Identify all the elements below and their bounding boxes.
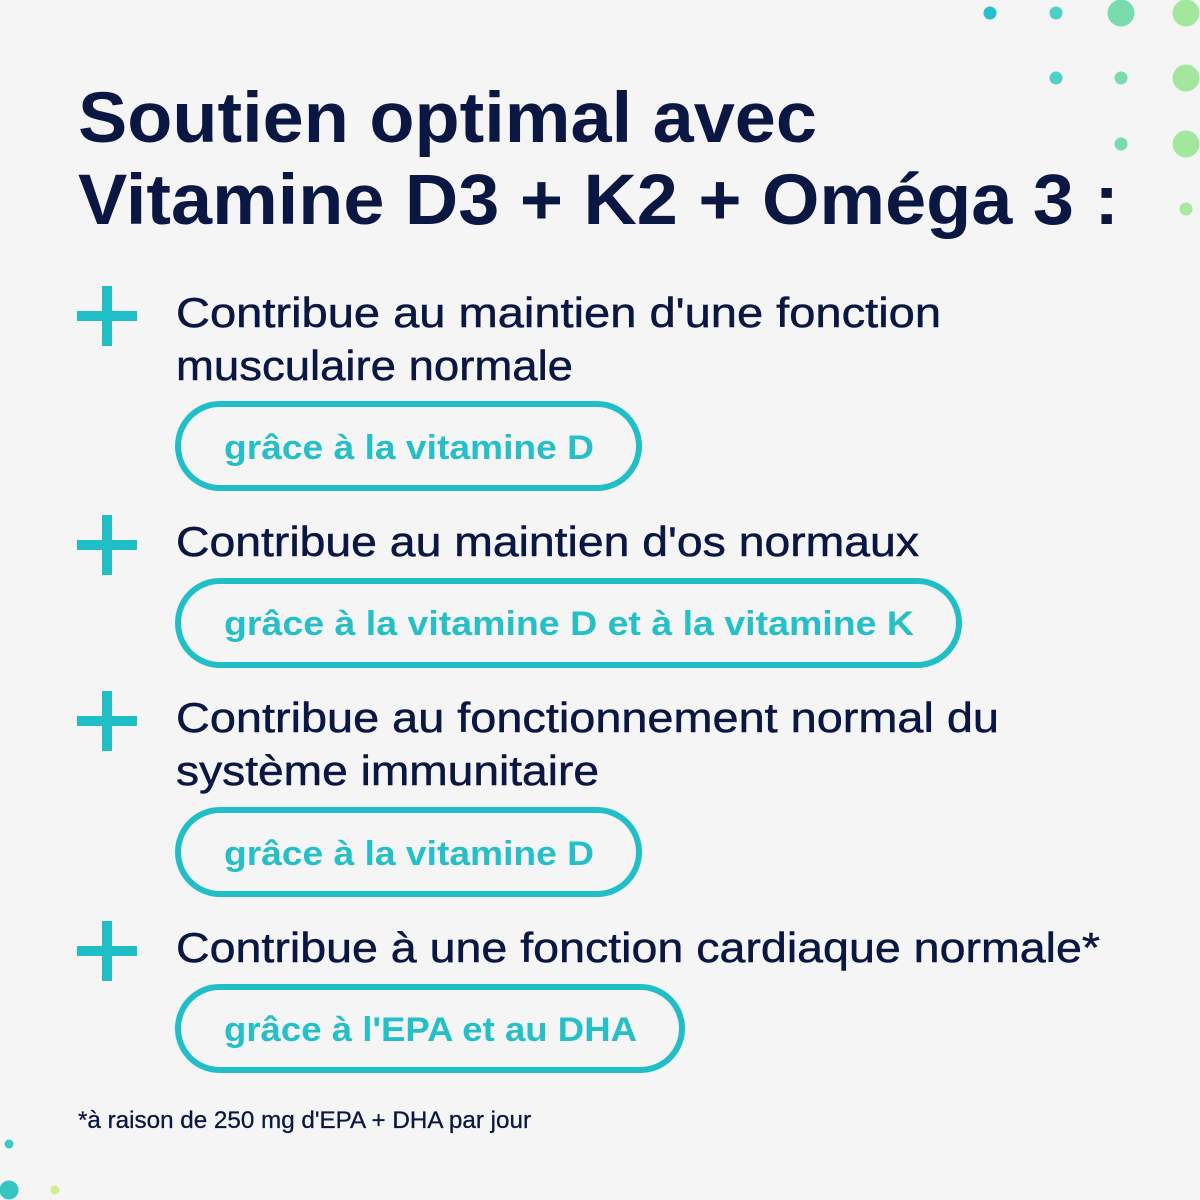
benefit 4: heart [77, 921, 1100, 1070]
pill: vitamin D: grâce à la vitamine D [224, 429, 594, 467]
benefit text: Contribue au maintien d'os normaux [176, 518, 919, 565]
title: Vitamine D3 + K2 + Oméga 3 : [78, 161, 1119, 240]
icon: plus [77, 515, 137, 575]
decorative dots: bottom left [0, 1140, 60, 1200]
benefit text [176, 289, 941, 389]
decorative dots: top right [984, 0, 1200, 216]
pill: vitamins D and K [178, 581, 959, 665]
pill: vitamin D [178, 404, 639, 488]
benefit text [176, 694, 999, 794]
icon: plus [77, 286, 137, 346]
benefit 2: bones [77, 515, 959, 665]
benefit 1: muscle function [77, 286, 941, 488]
pill: vitamins D and K: grâce à la vitamine D et à la vitamine K [224, 605, 914, 643]
benefit text: Contribue au maintien d'une fonction [176, 289, 941, 336]
benefit 3: immune system [77, 691, 999, 894]
pill: EPA and DHA [178, 987, 682, 1070]
title [78, 79, 1119, 240]
pill: EPA and DHA: grâce à l'EPA et au DHA [224, 1011, 637, 1049]
benefit text: musculaire normale [176, 342, 573, 389]
pill: vitamin D: grâce à la vitamine D [224, 835, 594, 873]
benefit text: Contribue à une fonction cardiaque normale* [176, 924, 1100, 971]
title: Soutien optimal avec [78, 79, 817, 158]
icon: plus [77, 921, 137, 981]
benefit text: système immunitaire [176, 747, 599, 794]
benefit text: Contribue au fonctionnement normal du [176, 694, 999, 741]
pill: vitamin D [178, 810, 639, 894]
footnote: *à raison de 250 mg d'EPA + DHA par jour [78, 1107, 531, 1134]
icon: plus [77, 691, 137, 751]
